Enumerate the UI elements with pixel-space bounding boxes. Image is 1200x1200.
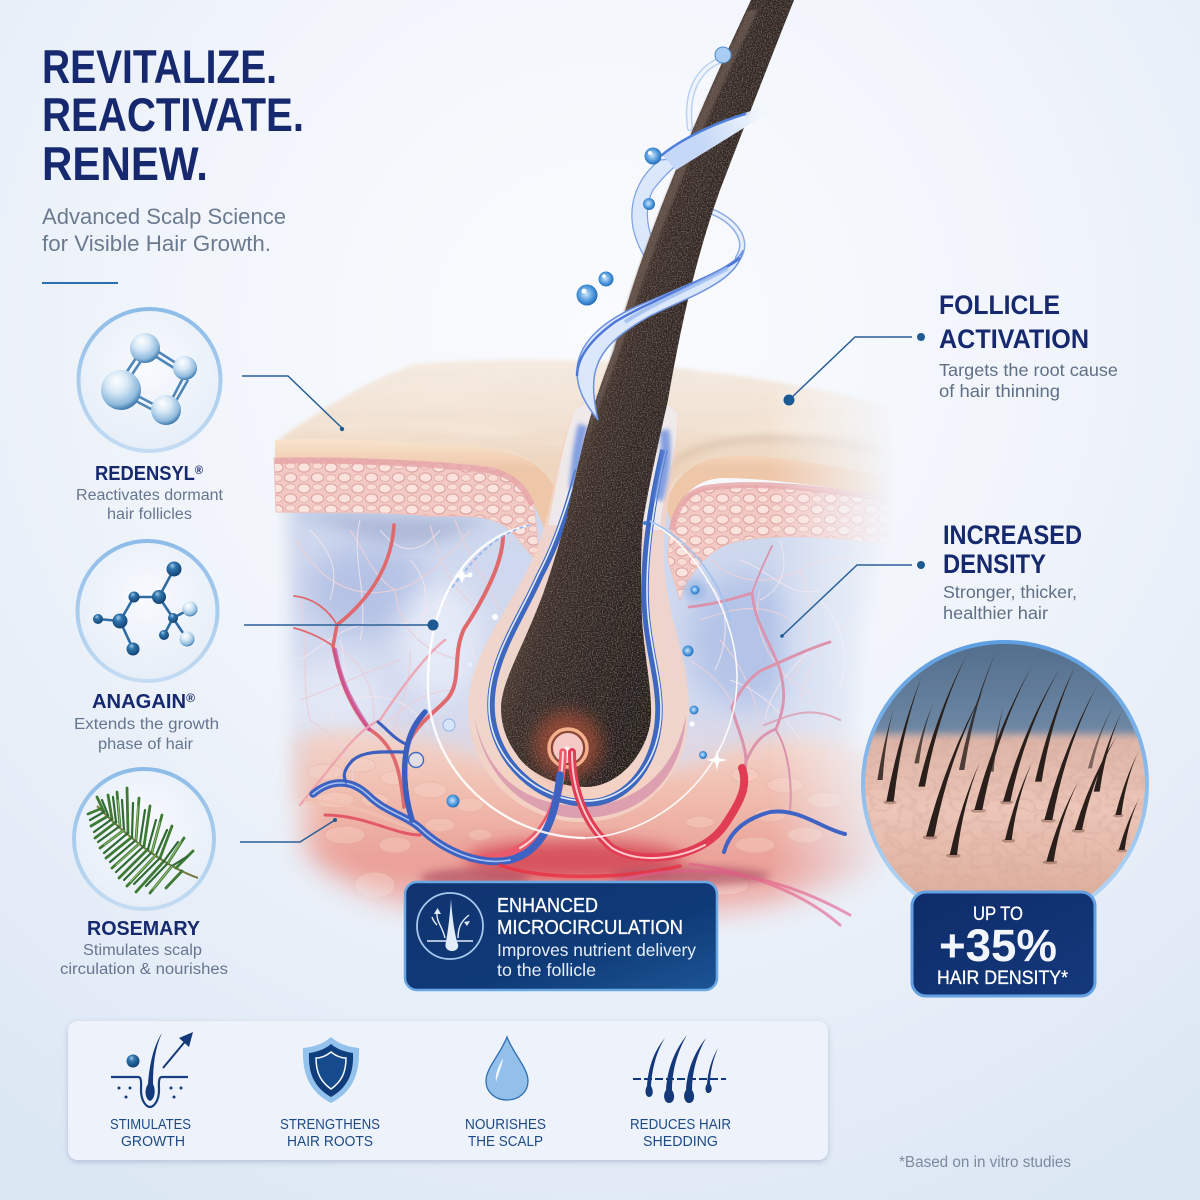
ingredient name: ANAGAIN: [92, 691, 185, 713]
title: REACTIVATE.: [42, 88, 304, 141]
subtitle: [42, 204, 286, 256]
icon: water drop: [486, 1037, 528, 1100]
left arteries: [294, 525, 503, 807]
follicle sheath lower tint: [474, 716, 686, 818]
scalp close-up inset: [861, 640, 1149, 898]
panel: Anagain ingredient: [74, 541, 219, 753]
left cell layer: [274, 458, 540, 565]
label: HAIR ROOTS: [287, 1133, 373, 1150]
ingredient description: hair follicles: [107, 506, 192, 523]
follicle sheath translucent top: [548, 392, 677, 530]
label: GROWTH: [121, 1133, 185, 1150]
label: THE SCALP: [468, 1133, 543, 1150]
right vein: [724, 811, 845, 852]
illustration: skin cross-section tissue: [270, 360, 905, 935]
leader line: Increased Density: [780, 561, 925, 638]
leader line: Follicle Activation: [784, 333, 925, 406]
ingredient description: Extends the growth: [74, 716, 219, 733]
callout heading: FOLLICLE: [939, 290, 1060, 320]
label: NOURISHES: [465, 1116, 546, 1133]
water droplets on hair: [576, 47, 731, 306]
panel: benefits bar: [68, 1021, 828, 1160]
callout: enhanced microcirculation: [405, 882, 717, 990]
ingredient description: Reactivates dormant: [76, 487, 224, 504]
badge: +35% hair density: UP TO: [973, 904, 1023, 925]
follicle outer sheath: [468, 388, 689, 822]
left red lower vessel: [325, 815, 420, 835]
pale distal vessels: [300, 640, 445, 830]
title: [42, 40, 304, 190]
right epidermis band: [665, 456, 883, 524]
blood vessels from papilla: [313, 712, 850, 925]
benefit: stimulates growth: [110, 1032, 193, 1150]
label: REDUCES HAIR: [630, 1116, 731, 1133]
ingredient name: ®: [186, 691, 195, 705]
description: Improves nutrient delivery: [497, 940, 696, 960]
right vessels: [689, 546, 840, 810]
lower ribbon gloss: [625, 268, 728, 322]
water ribbon behind hair: [689, 60, 742, 258]
left pink membrane: [275, 461, 532, 505]
heading: ENHANCED: [497, 895, 598, 917]
label: STRENGTHENS: [280, 1116, 380, 1133]
callout text: Targets the root cause: [939, 360, 1118, 380]
hair shaft and bulb: [501, 0, 794, 787]
callout text: of hair thinning: [939, 381, 1060, 401]
label: [465, 1116, 546, 1150]
icon: rosemary sprig: [74, 769, 214, 909]
finer connective fibres: [300, 520, 844, 740]
hypodermis layer: [270, 731, 900, 935]
ingredient description: Stimulates scalp: [83, 942, 202, 959]
icon: hair with circulation arrows: [417, 893, 483, 959]
icon: shield: [303, 1037, 359, 1103]
ingredient description: circulation & nourishes: [60, 961, 228, 978]
upper ribbon band: [662, 100, 786, 170]
pink lower vessels: [620, 864, 850, 925]
ingredient name: ®: [195, 463, 203, 477]
right cell layer: [668, 486, 905, 600]
ingredient name: ROSEMARY: [87, 918, 201, 940]
blood vessels behind follicle: [294, 525, 845, 852]
ingredient description: [74, 716, 219, 753]
badge: +35% hair density: +35%: [939, 920, 1057, 971]
glowing red core: [500, 865, 680, 876]
subtitle: for Visible Hair Growth.: [42, 231, 271, 256]
icon: growing hair with arrow: [111, 1032, 193, 1107]
follicle blue lining: [489, 425, 666, 803]
icon: four hairs through scalp line: [633, 1035, 726, 1103]
dermis layer: [278, 505, 898, 805]
callout text: [943, 582, 1077, 623]
label: STIMULATES: [110, 1116, 191, 1133]
heading: MICROCIRCULATION: [497, 917, 683, 939]
leader line: Anagain: [244, 620, 438, 630]
leader line: Rosemary: [240, 818, 337, 842]
callout heading: INCREASED: [943, 520, 1082, 550]
callout: follicle activation: [939, 290, 1118, 401]
footnote: *Based on in vitro studies: [899, 1154, 1071, 1171]
right pink membrane: [672, 485, 905, 530]
sparkles and droplets around the follicle: [443, 521, 727, 808]
ingredient description: [60, 942, 228, 978]
water ribbon upper loop left side: [632, 158, 685, 262]
title: RENEW.: [42, 137, 208, 190]
benefit: reduces hair shedding: [630, 1035, 731, 1150]
ingredient name: REDENSYL: [95, 463, 204, 485]
red vessel left: [470, 752, 563, 859]
bubble on vein: [408, 752, 424, 768]
ingredient description: phase of hair: [98, 736, 193, 753]
callout heading: DENSITY: [943, 549, 1046, 579]
icon: branched molecule: [78, 541, 218, 681]
surface shading: [674, 433, 832, 466]
lower ribbon blue upper edge: [577, 258, 740, 376]
callout text: [939, 360, 1118, 401]
web of connective fibres: [296, 520, 860, 790]
main vein: [313, 712, 560, 861]
water ribbon in front of hair: [577, 100, 786, 420]
papilla glow: [534, 711, 602, 779]
panel: Redensyl ingredient: [76, 309, 224, 523]
callout heading: [943, 520, 1082, 579]
hair shaft highlight: [586, 10, 758, 445]
callout text: Stronger, thicker,: [943, 582, 1077, 602]
callout: increased density: [943, 520, 1082, 623]
icon: molecule ring: [78, 309, 220, 451]
title: REVITALIZE.: [42, 40, 277, 93]
label: [630, 1116, 731, 1150]
heading: [497, 895, 683, 939]
lower ribbon band: [577, 250, 743, 420]
top skin surface: [278, 358, 879, 492]
description: [497, 940, 696, 980]
panel: Rosemary ingredient: [60, 769, 228, 978]
energy orbit ring: [428, 521, 737, 838]
benefit: nourishes the scalp: [465, 1037, 546, 1150]
callout text: healthier hair: [943, 603, 1048, 623]
label: SHEDDING: [643, 1133, 718, 1150]
ingredient description: [76, 487, 224, 523]
description: to the follicle: [497, 960, 596, 980]
badge: +35% hair density: [912, 892, 1095, 996]
label: [280, 1116, 380, 1150]
left epidermis band: [275, 439, 560, 530]
benefit: strengthens hair roots: [280, 1037, 380, 1150]
label: [110, 1116, 191, 1150]
red vessel right: [572, 752, 744, 858]
leader line: Redensyl: [242, 376, 344, 431]
callout heading: [939, 290, 1089, 354]
subtitle: Advanced Scalp Science: [42, 204, 286, 229]
callout heading: ACTIVATION: [939, 324, 1089, 354]
badge: +35% hair density: HAIR DENSITY*: [937, 968, 1069, 989]
upper ribbon blue edge: [662, 114, 745, 155]
